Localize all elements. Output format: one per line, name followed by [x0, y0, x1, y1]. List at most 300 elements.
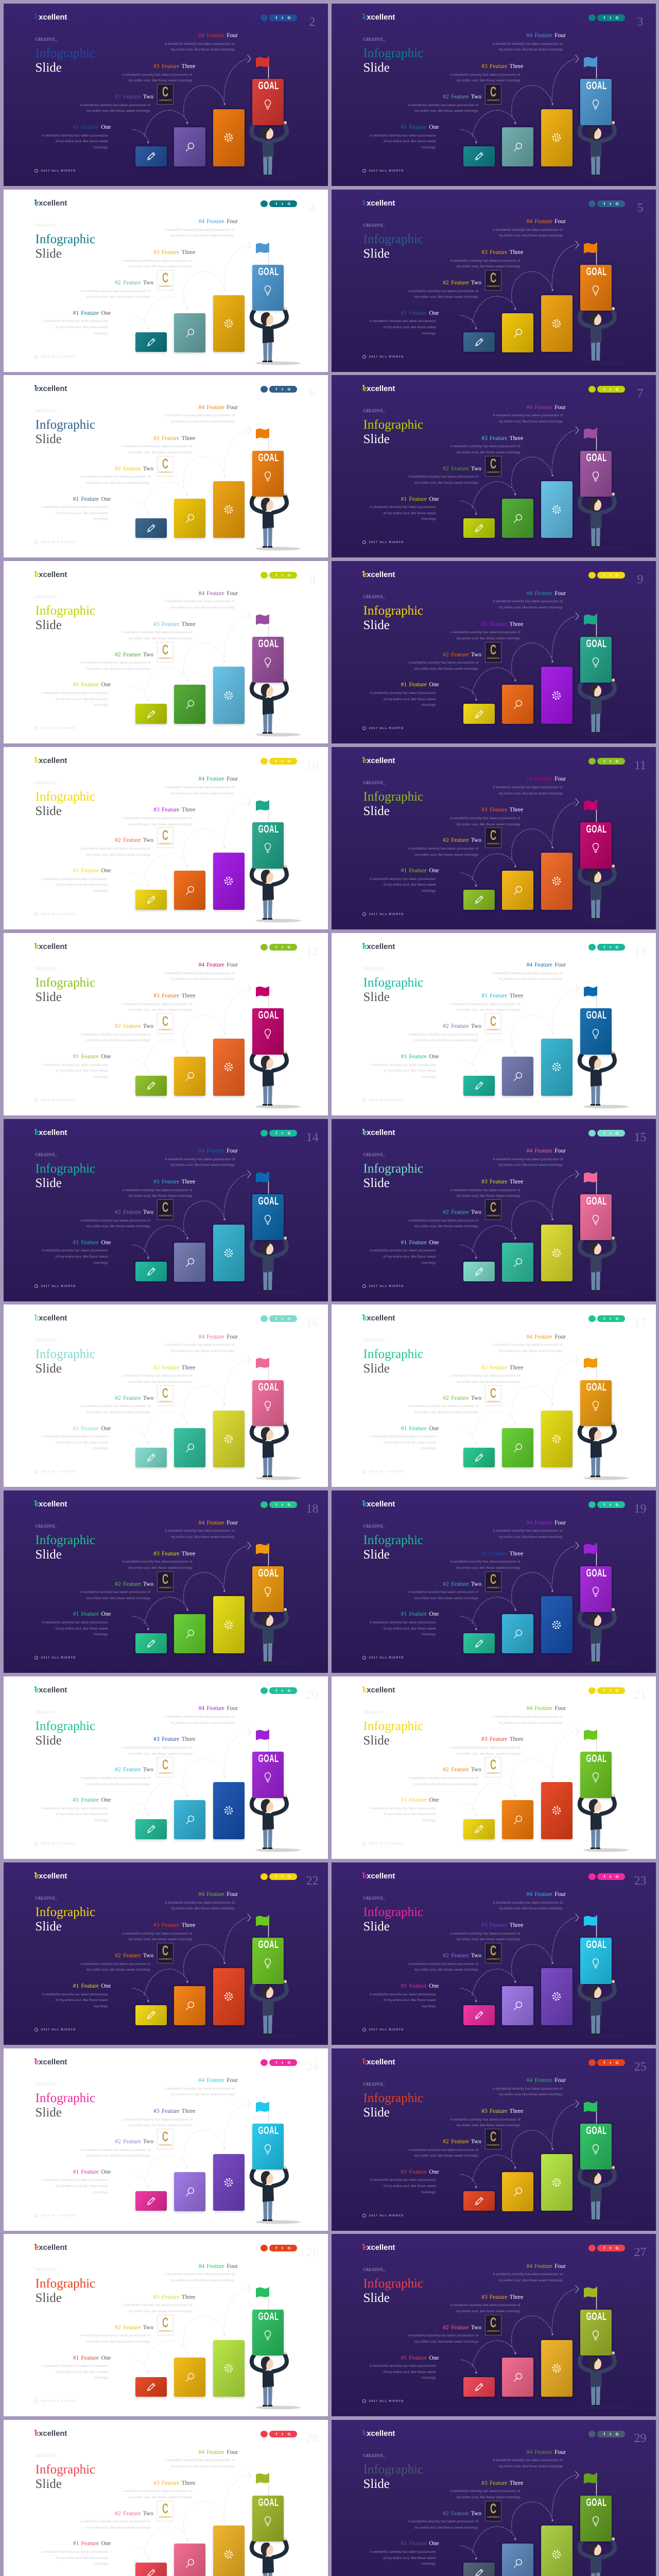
bar 1: [135, 2563, 167, 2576]
person: [251, 1794, 301, 1852]
flag: [255, 800, 269, 823]
social icons: f t G: [603, 15, 619, 20]
feature 2: [0, 465, 153, 486]
dotted arrows: [132, 1914, 250, 2002]
feature 2: A wonderful serenity has taken possession of: [80, 290, 150, 293]
feature 2: [0, 2138, 153, 2159]
goal block: GOAL: [586, 1381, 607, 1393]
feature 2: my entire soul, like these sweet mornings: [414, 2340, 478, 2344]
feature 4: [83, 1519, 238, 1540]
flag: [255, 428, 269, 451]
heading: [35, 781, 102, 819]
feature 4: #4 Feature Four: [527, 1705, 566, 1711]
badge: CONTENTS: [159, 471, 171, 473]
dotted arrows: [460, 1356, 579, 1444]
feature 4: [83, 775, 238, 796]
dotted arrows: [460, 1171, 579, 1258]
feature 4: my entire soul, like these sweet mornings: [171, 234, 235, 238]
copyright: 2017 ALL RIGHTS: [41, 1656, 76, 1659]
goal block: GOAL: [586, 1195, 607, 1207]
social icons: [588, 14, 625, 21]
feature 1: A wonderful serenity has taken possession: [370, 2364, 436, 2368]
feature 1: of my entire soul, like these sweet: [56, 140, 108, 143]
person: [251, 2351, 301, 2410]
feature 1: [0, 2168, 111, 2195]
badge: C: [490, 1013, 496, 1029]
feature 3: [369, 2480, 523, 2500]
feature 4: [83, 1705, 238, 1726]
feature 2: #2 Feature Two: [115, 837, 153, 843]
feature 3: #3 Feature Three: [481, 435, 523, 442]
bar 3: [213, 109, 245, 166]
social icons: [588, 2431, 625, 2437]
social icons: f t G: [603, 1130, 619, 1136]
badge: C: [490, 456, 496, 471]
feature 1: [0, 1425, 111, 1452]
feature 3: #3 Feature Three: [481, 63, 523, 70]
heading: [363, 2267, 430, 2306]
feature 4: #4 Feature Four: [527, 590, 566, 597]
logo: excellent: [362, 1500, 395, 1509]
feature 3: my entire soul, like these sweet mornings: [128, 1194, 193, 1198]
badge: CONTENTS: [487, 471, 499, 473]
feature 3: A wonderful serenity has taken possession of: [450, 1932, 520, 1936]
feature 2: my entire soul, like these sweet mornings: [86, 1225, 150, 1228]
feature 1: mornings: [94, 146, 108, 149]
feature 1: #1 Feature One: [401, 1054, 439, 1060]
feature 3: my entire soul, like these sweet mornings: [456, 2310, 520, 2313]
feature 4: A wonderful serenity has taken possession of: [493, 600, 563, 603]
social icons: f t G: [276, 1874, 290, 1879]
badge: [157, 1757, 174, 1777]
illustration: [3, 933, 327, 1115]
feature 3: #3 Feature Three: [153, 249, 196, 256]
feature 4: A wonderful serenity has taken possession of: [165, 1343, 235, 1347]
page number: 29: [634, 2432, 647, 2445]
feature 4: A wonderful serenity has taken possession of: [165, 228, 235, 232]
social icons: [261, 1873, 297, 1880]
page number: 13: [634, 945, 647, 958]
heading: Infographic: [35, 232, 95, 246]
feature 1: #1 Feature One: [73, 1054, 111, 1060]
social icons: f t G: [276, 1688, 290, 1693]
feature 2: my entire soul, like these sweet mornings: [414, 2154, 478, 2158]
social icons: [261, 14, 297, 21]
heading: Slide: [35, 1734, 62, 1748]
dotted arrows: [460, 241, 579, 329]
feature 3: A wonderful serenity has taken possession of: [450, 1003, 520, 1006]
badge: C: [490, 2501, 496, 2516]
heading: [363, 595, 430, 633]
goal block: [252, 1566, 284, 1612]
badge: CONTENTS: [487, 285, 499, 287]
page number: 22: [306, 1874, 318, 1888]
dotted arrows: [460, 1914, 579, 2002]
feature 2: #2 Feature Two: [443, 94, 481, 100]
feature 1: of my entire soul, like these sweet: [56, 1998, 108, 2002]
logo: excellent: [34, 571, 67, 579]
feature 3: my entire soul, like these sweet mornings: [128, 1566, 193, 1570]
illustration: [3, 747, 327, 929]
person: [251, 1608, 301, 1666]
badge: [157, 1013, 174, 1034]
logo: excellent: [362, 2058, 395, 2066]
goal block: [252, 265, 284, 311]
heading: Infographic: [363, 2091, 423, 2105]
heading: [363, 781, 430, 819]
feature 4: #4 Feature Four: [527, 1334, 566, 1340]
feature 1: #1 Feature One: [73, 868, 111, 874]
copyright: 2017 ALL RIGHTS: [369, 727, 404, 730]
social icons: [261, 1501, 297, 1508]
feature 2: A wonderful serenity has taken possession of: [408, 2334, 478, 2337]
page number: 10: [306, 759, 318, 772]
badge: [485, 1385, 501, 1406]
heading: Slide: [35, 2477, 62, 2491]
feature 1: #1 Feature One: [73, 1240, 111, 1246]
badge: C: [162, 2501, 168, 2516]
feature 4: A wonderful serenity has taken possession of: [165, 1901, 235, 1905]
badge: CONTENTS: [159, 2144, 171, 2146]
feature 2: [0, 2510, 153, 2531]
feature 2: my entire soul, like these sweet mornings: [414, 1225, 478, 1228]
feature 1: mornings: [94, 2005, 108, 2008]
flag: [255, 2287, 269, 2310]
page number: 8: [309, 573, 315, 586]
badge: [485, 270, 501, 291]
badge: CONTENTS: [487, 1028, 499, 1031]
goal block: GOAL: [258, 266, 279, 278]
logo: excellent: [362, 571, 395, 579]
copyright: 2017 ALL RIGHTS: [369, 2028, 404, 2031]
feature 1: #1 Feature One: [401, 1426, 439, 1432]
badge: C: [490, 642, 496, 657]
feature 3: my entire soul, like these sweet mornings: [456, 1380, 520, 1384]
bar 3: [541, 1596, 573, 1653]
feature 4: [411, 1519, 566, 1540]
dotted arrows: [460, 2285, 579, 2374]
feature 2: my entire soul, like these sweet mornings: [86, 1968, 150, 1972]
feature 1: mornings: [422, 1261, 436, 1265]
badge: CONTENTS: [159, 99, 171, 101]
feature 2: #2 Feature Two: [115, 94, 153, 100]
logo: excellent: [34, 757, 67, 765]
goal block: GOAL: [258, 2311, 279, 2323]
badge: CONTENTS: [159, 1400, 171, 1403]
heading: [35, 1338, 102, 1376]
feature 2: A wonderful serenity has taken possession of: [408, 1590, 478, 1594]
logo: excellent: [34, 1128, 67, 1137]
bar 3: [541, 2526, 573, 2576]
feature 1: of my entire soul, like these sweet: [383, 140, 436, 143]
feature 2: [0, 837, 153, 858]
feature 3: #3 Feature Three: [481, 249, 523, 256]
person: [579, 121, 628, 179]
feature 2: #2 Feature Two: [443, 1953, 481, 1959]
feature 1: mornings: [94, 889, 108, 893]
feature 1: [284, 1239, 439, 1266]
bar 2: [502, 1614, 533, 1653]
feature 2: #2 Feature Two: [443, 652, 481, 658]
feature 4: my entire soul, like these sweet mornings: [499, 977, 563, 981]
feature 2: my entire soul, like these sweet mornings: [86, 667, 150, 671]
page number: 15: [634, 1130, 647, 1144]
illustration: [3, 2420, 327, 2576]
feature 2: my entire soul, like these sweet mornings: [86, 2340, 150, 2344]
feature 1: A wonderful serenity has taken possession: [42, 1249, 108, 1252]
badge: CONTENTS: [159, 842, 171, 845]
social icons: f t G: [276, 2432, 290, 2436]
feature 3: [41, 1922, 196, 1943]
illustration: [460, 55, 617, 176]
feature 3: A wonderful serenity has taken possession of: [122, 2489, 193, 2493]
feature 1: of my entire soul, like these sweet: [56, 1812, 108, 1816]
bar 3: [213, 2526, 245, 2576]
person: [579, 2351, 628, 2410]
feature 2: my entire soul, like these sweet mornings: [414, 1597, 478, 1600]
goal block: GOAL: [586, 80, 607, 92]
feature 2: my entire soul, like these sweet mornings: [414, 1411, 478, 1414]
feature 1: #1 Feature One: [401, 1983, 439, 1989]
feature 4: #4 Feature Four: [199, 776, 238, 782]
feature 2: [80, 94, 153, 113]
feature 1: mornings: [94, 2191, 108, 2194]
feature 4: A wonderful serenity has taken possession of: [493, 1715, 563, 1719]
page number: 6: [309, 387, 315, 400]
heading: [35, 37, 95, 75]
feature 1: A wonderful serenity has taken possession: [370, 1063, 436, 1067]
badge: [157, 270, 174, 291]
bar 1: [463, 890, 495, 910]
feature 2: A wonderful serenity has taken possession of: [408, 1033, 478, 1037]
feature 1: of my entire soul, like these sweet: [383, 698, 436, 701]
heading: CREATIVE_: [363, 1152, 385, 1157]
illustration: [332, 1490, 656, 1673]
slide 6: [3, 375, 327, 557]
feature 4: [83, 1333, 238, 1354]
bar 1: [463, 2563, 495, 2576]
social icons: [261, 1687, 297, 1694]
feature 2: my entire soul, like these sweet mornings: [414, 295, 478, 299]
feature 4: [411, 590, 566, 611]
flag: [255, 1730, 269, 1752]
page number: 18: [306, 1502, 318, 1516]
goal block: GOAL: [258, 823, 279, 835]
goal block: [580, 822, 612, 869]
feature 4: [165, 32, 238, 52]
feature 3: my entire soul, like these sweet mornings: [128, 79, 193, 82]
feature 1: #1 Feature One: [73, 2540, 111, 2547]
feature 1: [0, 1239, 111, 1266]
feature 1: [0, 1982, 111, 2009]
feature 3: my entire soul, like these sweet mornings: [128, 637, 193, 640]
feature 2: A wonderful serenity has taken possession of: [408, 475, 478, 479]
feature 2: my entire soul, like these sweet mornings: [86, 2154, 150, 2158]
feature 3: my entire soul, like these sweet mornings: [456, 1008, 520, 1012]
heading: Infographic: [363, 418, 423, 432]
feature 3: A wonderful serenity has taken possession of: [122, 1746, 193, 1750]
feature 3: [41, 1364, 196, 1385]
bar 3: [213, 667, 245, 724]
page number: 19: [634, 1502, 647, 1516]
feature 2: my entire soul, like these sweet mornings: [414, 1039, 478, 1042]
feature 4: [411, 1705, 566, 1726]
feature 4: #4 Feature Four: [527, 2263, 566, 2269]
badge: [485, 1571, 501, 1592]
bar 1: [135, 2005, 167, 2025]
feature 4: #4 Feature Four: [199, 1520, 238, 1526]
feature 1: of my entire soul, like these sweet: [383, 883, 436, 887]
dotted arrows: [460, 799, 579, 886]
social icons: f t G: [603, 387, 619, 392]
feature 2: #2 Feature Two: [443, 2325, 481, 2331]
heading: [363, 2081, 430, 2120]
logo: excellent: [34, 1686, 67, 1694]
feature 2: A wonderful serenity has taken possession of: [80, 1033, 150, 1037]
feature 3: [369, 435, 523, 456]
social icons: [261, 944, 297, 951]
badge: C: [162, 1571, 168, 1587]
logo: excellent: [34, 2430, 67, 2438]
badge: C: [162, 1757, 168, 1772]
person: [251, 865, 301, 922]
feature 3: A wonderful serenity has taken possession of: [450, 259, 520, 263]
bar 2: [502, 127, 533, 166]
feature 3: my entire soul, like these sweet mornings: [456, 265, 520, 268]
bar 1: [135, 704, 167, 724]
feature 4: A wonderful serenity has taken possession of: [165, 1158, 235, 1161]
feature 4: [83, 1891, 238, 1912]
heading: Slide: [35, 61, 62, 75]
feature 1: mornings: [422, 1075, 436, 1079]
badge: C: [162, 1013, 168, 1029]
feature 1: #1 Feature One: [401, 1240, 439, 1246]
feature 1: #1 Feature One: [401, 868, 439, 874]
feature 3: [41, 435, 196, 456]
heading: CREATIVE_: [35, 2453, 57, 2458]
feature 4: A wonderful serenity has taken possession of: [165, 786, 235, 789]
flag: [584, 1544, 597, 1566]
heading: Slide: [363, 2291, 390, 2305]
badge: CONTENTS: [487, 1586, 499, 1589]
heading: CREATIVE_: [35, 223, 57, 228]
heading: Infographic: [35, 1533, 95, 1547]
slide 14: [3, 1119, 327, 1301]
copyright: 2017 ALL RIGHTS: [369, 170, 404, 173]
feature 4: A wonderful serenity has taken possession of: [493, 2273, 563, 2276]
heading: [363, 1338, 430, 1376]
bar 2: [174, 1428, 205, 1467]
page number: 4: [309, 201, 315, 214]
goal block: [252, 1938, 284, 1984]
feature 2: A wonderful serenity has taken possession of: [408, 847, 478, 851]
feature 1: A wonderful serenity has taken possession: [42, 134, 108, 138]
feature 3: #3 Feature Three: [481, 1365, 523, 1371]
feature 3: #3 Feature Three: [153, 1179, 196, 1185]
goal block: GOAL: [258, 80, 279, 92]
feature 3: #3 Feature Three: [153, 1922, 196, 1928]
heading: Slide: [35, 1362, 62, 1376]
heading: Infographic: [363, 46, 423, 60]
feature 4: #4 Feature Four: [527, 1148, 566, 1154]
feature 1: [42, 124, 111, 149]
feature 1: #1 Feature One: [401, 1611, 439, 1617]
person: [251, 2166, 301, 2224]
illustration: [332, 1304, 656, 1487]
goal block: GOAL: [586, 1753, 607, 1765]
goal block: [252, 2496, 284, 2541]
goal block: [580, 637, 612, 683]
heading: CREATIVE_: [35, 1338, 57, 1343]
copyright: 2017 ALL RIGHTS: [369, 1842, 404, 1845]
feature 3: #3 Feature Three: [481, 2480, 523, 2486]
feature 4: my entire soul, like these sweet mornings: [171, 1721, 235, 1725]
heading: Slide: [35, 804, 62, 818]
feature 3: my entire soul, like these sweet mornings: [456, 1566, 520, 1570]
goal block: GOAL: [258, 2497, 279, 2509]
feature 1: [284, 867, 439, 894]
bar 3: [541, 853, 573, 910]
feature 1: of my entire soul, like these sweet: [56, 883, 108, 887]
heading: Infographic: [35, 2091, 95, 2105]
slide 9: [332, 561, 656, 743]
feature 1: [0, 1797, 111, 1824]
feature 1: #1 Feature One: [73, 496, 111, 502]
feature 3: my entire soul, like these sweet mornings: [456, 79, 520, 82]
illustration: [332, 2420, 656, 2576]
feature 2: #2 Feature Two: [443, 1767, 481, 1773]
feature 4: A wonderful serenity has taken possession of: [493, 1343, 563, 1347]
bar 2: [174, 1243, 205, 1282]
person: [579, 493, 628, 551]
bar 2: [174, 2358, 205, 2397]
feature 1: #1 Feature One: [73, 1797, 111, 1803]
feature 2: my entire soul, like these sweet mornings: [414, 667, 478, 671]
feature 2: #2 Feature Two: [443, 280, 481, 286]
badge: [157, 1199, 174, 1220]
bar 1: [463, 704, 495, 724]
heading: Infographic: [363, 1533, 423, 1547]
social icons: f t G: [276, 2246, 290, 2250]
slide 29: [332, 2420, 656, 2576]
feature 1: A wonderful serenity has taken possession: [370, 134, 436, 138]
feature 2: A wonderful serenity has taken possession of: [80, 847, 150, 851]
feature 3: #3 Feature Three: [481, 1922, 523, 1928]
bar 2: [502, 1243, 533, 1282]
person: [251, 679, 301, 737]
feature 4: [83, 961, 238, 982]
feature 4: my entire soul, like these sweet mornings: [171, 1907, 235, 1910]
feature 1: [284, 1797, 439, 1824]
feature 1: of my entire soul, like these sweet: [383, 1255, 436, 1259]
feature 4: my entire soul, like these sweet mornings: [171, 1349, 235, 1353]
illustration: [332, 190, 656, 372]
slide 20: [3, 1676, 327, 1859]
dotted arrows: [460, 2100, 579, 2188]
feature 3: A wonderful serenity has taken possession of: [122, 1003, 193, 1006]
goal block: [580, 1008, 612, 1055]
feature 3: [41, 621, 196, 641]
feature 3: #3 Feature Three: [481, 993, 523, 999]
feature 4: A wonderful serenity has taken possession of: [493, 972, 563, 975]
feature 2: #2 Feature Two: [115, 280, 153, 286]
flag: [584, 1916, 597, 1938]
badge: [157, 1571, 174, 1592]
feature 1: #1 Feature One: [401, 310, 439, 316]
illustration: [3, 2234, 327, 2416]
badge: CONTENTS: [159, 1772, 171, 1774]
badge: [485, 1943, 501, 1963]
